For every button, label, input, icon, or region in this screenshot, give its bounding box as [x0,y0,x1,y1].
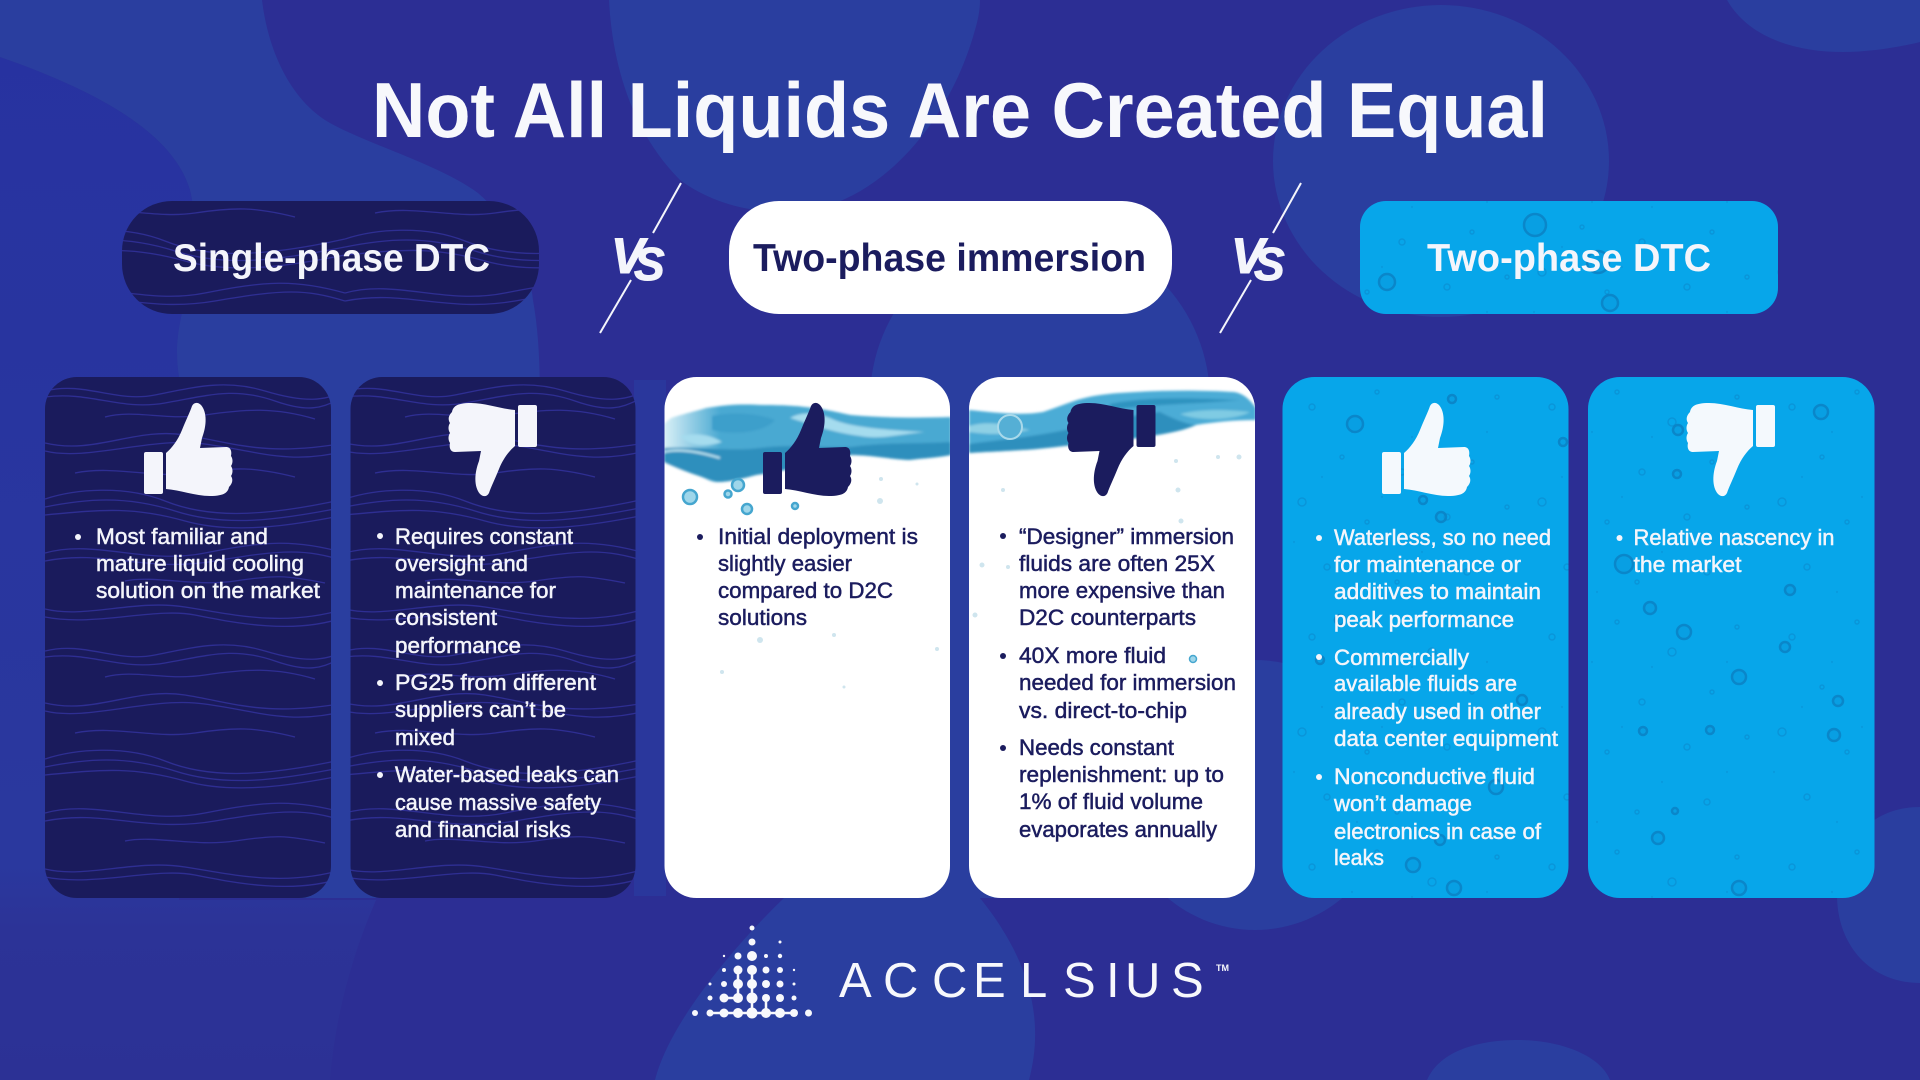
panel: two-phase immersion cons [969,377,1256,898]
bubbles [1615,405,1843,895]
icon: thumbs down [448,403,537,496]
bubbles [1316,395,1567,895]
pill: Single-phase DTC: Single-phase DTC [173,237,490,280]
cons list: “Designer” immersion [1019,524,1234,549]
cons list [1000,524,1236,842]
panel: single-phase DTC cons [350,377,636,898]
logo wordmark: ACCELSIUS [839,954,1204,1008]
title: Not All Liquids Are Created Equal [372,66,1548,154]
pros list: for maintenance or [1334,552,1521,577]
panel: two-phase immersion pros [664,377,951,898]
pros list: slightly easier [718,551,852,576]
cons list: more expensive than [1019,578,1225,603]
cons list: the market [1634,552,1742,577]
pros list: mature liquid cooling [96,551,304,576]
pros list [697,524,918,630]
pros list: Waterless, so no need [1334,525,1551,550]
pill: Two-phase immersion: Two-phase immersion [753,237,1146,280]
pros list [1316,525,1559,870]
cons list: oversight and [395,551,528,576]
pill: Two-phase DTC: Two-phase DTC [1427,237,1711,280]
pros list: Commercially [1334,645,1470,670]
cons list: consistent [395,605,498,630]
cons list: performance [395,633,521,658]
cons list: maintenance for [395,578,556,603]
vs divider 2: S [1254,238,1285,290]
logo mark: dot pyramid [692,926,812,1018]
cons list [1616,525,1834,577]
cons list: 1% of fluid volume [1019,789,1203,814]
vs divider 1: V [611,228,648,284]
water specks [972,454,1242,618]
pros list: peak performance [1334,607,1514,632]
card background [664,377,950,898]
pros list [75,524,321,603]
cons list: mixed [395,725,455,750]
card background [350,377,636,898]
pros list: data center equipment [1334,726,1559,751]
cons list: D2C counterparts [1019,605,1196,630]
icon: thumbs up [144,403,232,496]
cons list: Water-based leaks can [395,762,619,787]
pros list: electronics in case of [1334,819,1542,844]
cons list: Needs constant [1019,735,1175,760]
vs divider 1 [600,183,681,333]
pros list: solutions [718,605,807,630]
icon: thumbs up [1382,403,1470,496]
panel: two-phase DTC pros [1282,377,1568,898]
cons list: fluids are often 25X [1019,551,1215,576]
cons list: Relative nascency in [1634,525,1834,550]
pros list: available fluids are [1334,671,1517,696]
cons list: replenishment: up to [1019,762,1224,787]
pros list: already used in other [1334,699,1541,724]
water bubble [1190,656,1196,662]
cons list: cause massive safety [395,790,602,815]
card background [969,377,1255,898]
pros list: won’t damage [1333,791,1472,816]
vs divider 1: S [634,238,665,290]
water bubbles [683,479,798,514]
pill: Single-phase DTC [122,201,539,314]
cons list: evaporates annually [1019,817,1218,842]
logo: Accelsius [692,926,1229,1018]
cons list: suppliers can’t be [395,697,566,722]
panel: single-phase DTC pros [45,377,331,898]
pros list: leaks [1334,845,1384,870]
pros list: Initial deployment is [718,524,918,549]
vs divider 2 [1220,183,1301,333]
pros list: Nonconductive fluid [1334,764,1535,789]
icon: thumbs down [1686,403,1775,496]
water band [664,404,951,482]
pros list: Most familiar and [96,524,268,549]
cons list: and financial risks [395,817,571,842]
pros list: compared to D2C [718,578,893,603]
icon: thumbs up [763,403,852,496]
pros list: additives to maintain [1334,579,1541,604]
pill: Two-phase DTC [1360,201,1778,314]
cons list: 40X more fluid [1019,643,1166,668]
trademark: TM [1216,963,1229,973]
pill: Two-phase immersion [729,201,1172,314]
vs divider 2: V [1231,228,1268,284]
water specks [720,477,939,688]
cons list: needed for immersion [1019,670,1236,695]
cons list: PG25 from different [395,670,597,695]
card background [1588,377,1874,898]
cons list: Requires constant [395,524,574,549]
panel: two-phase DTC cons [1588,377,1874,898]
cons list: vs. direct-to-chip [1019,698,1187,723]
cons list [377,524,619,842]
card background [1282,377,1568,898]
water band [969,391,1256,453]
pros list: solution on the market [96,578,321,603]
icon: thumbs down [1067,403,1156,496]
card background [45,377,331,898]
